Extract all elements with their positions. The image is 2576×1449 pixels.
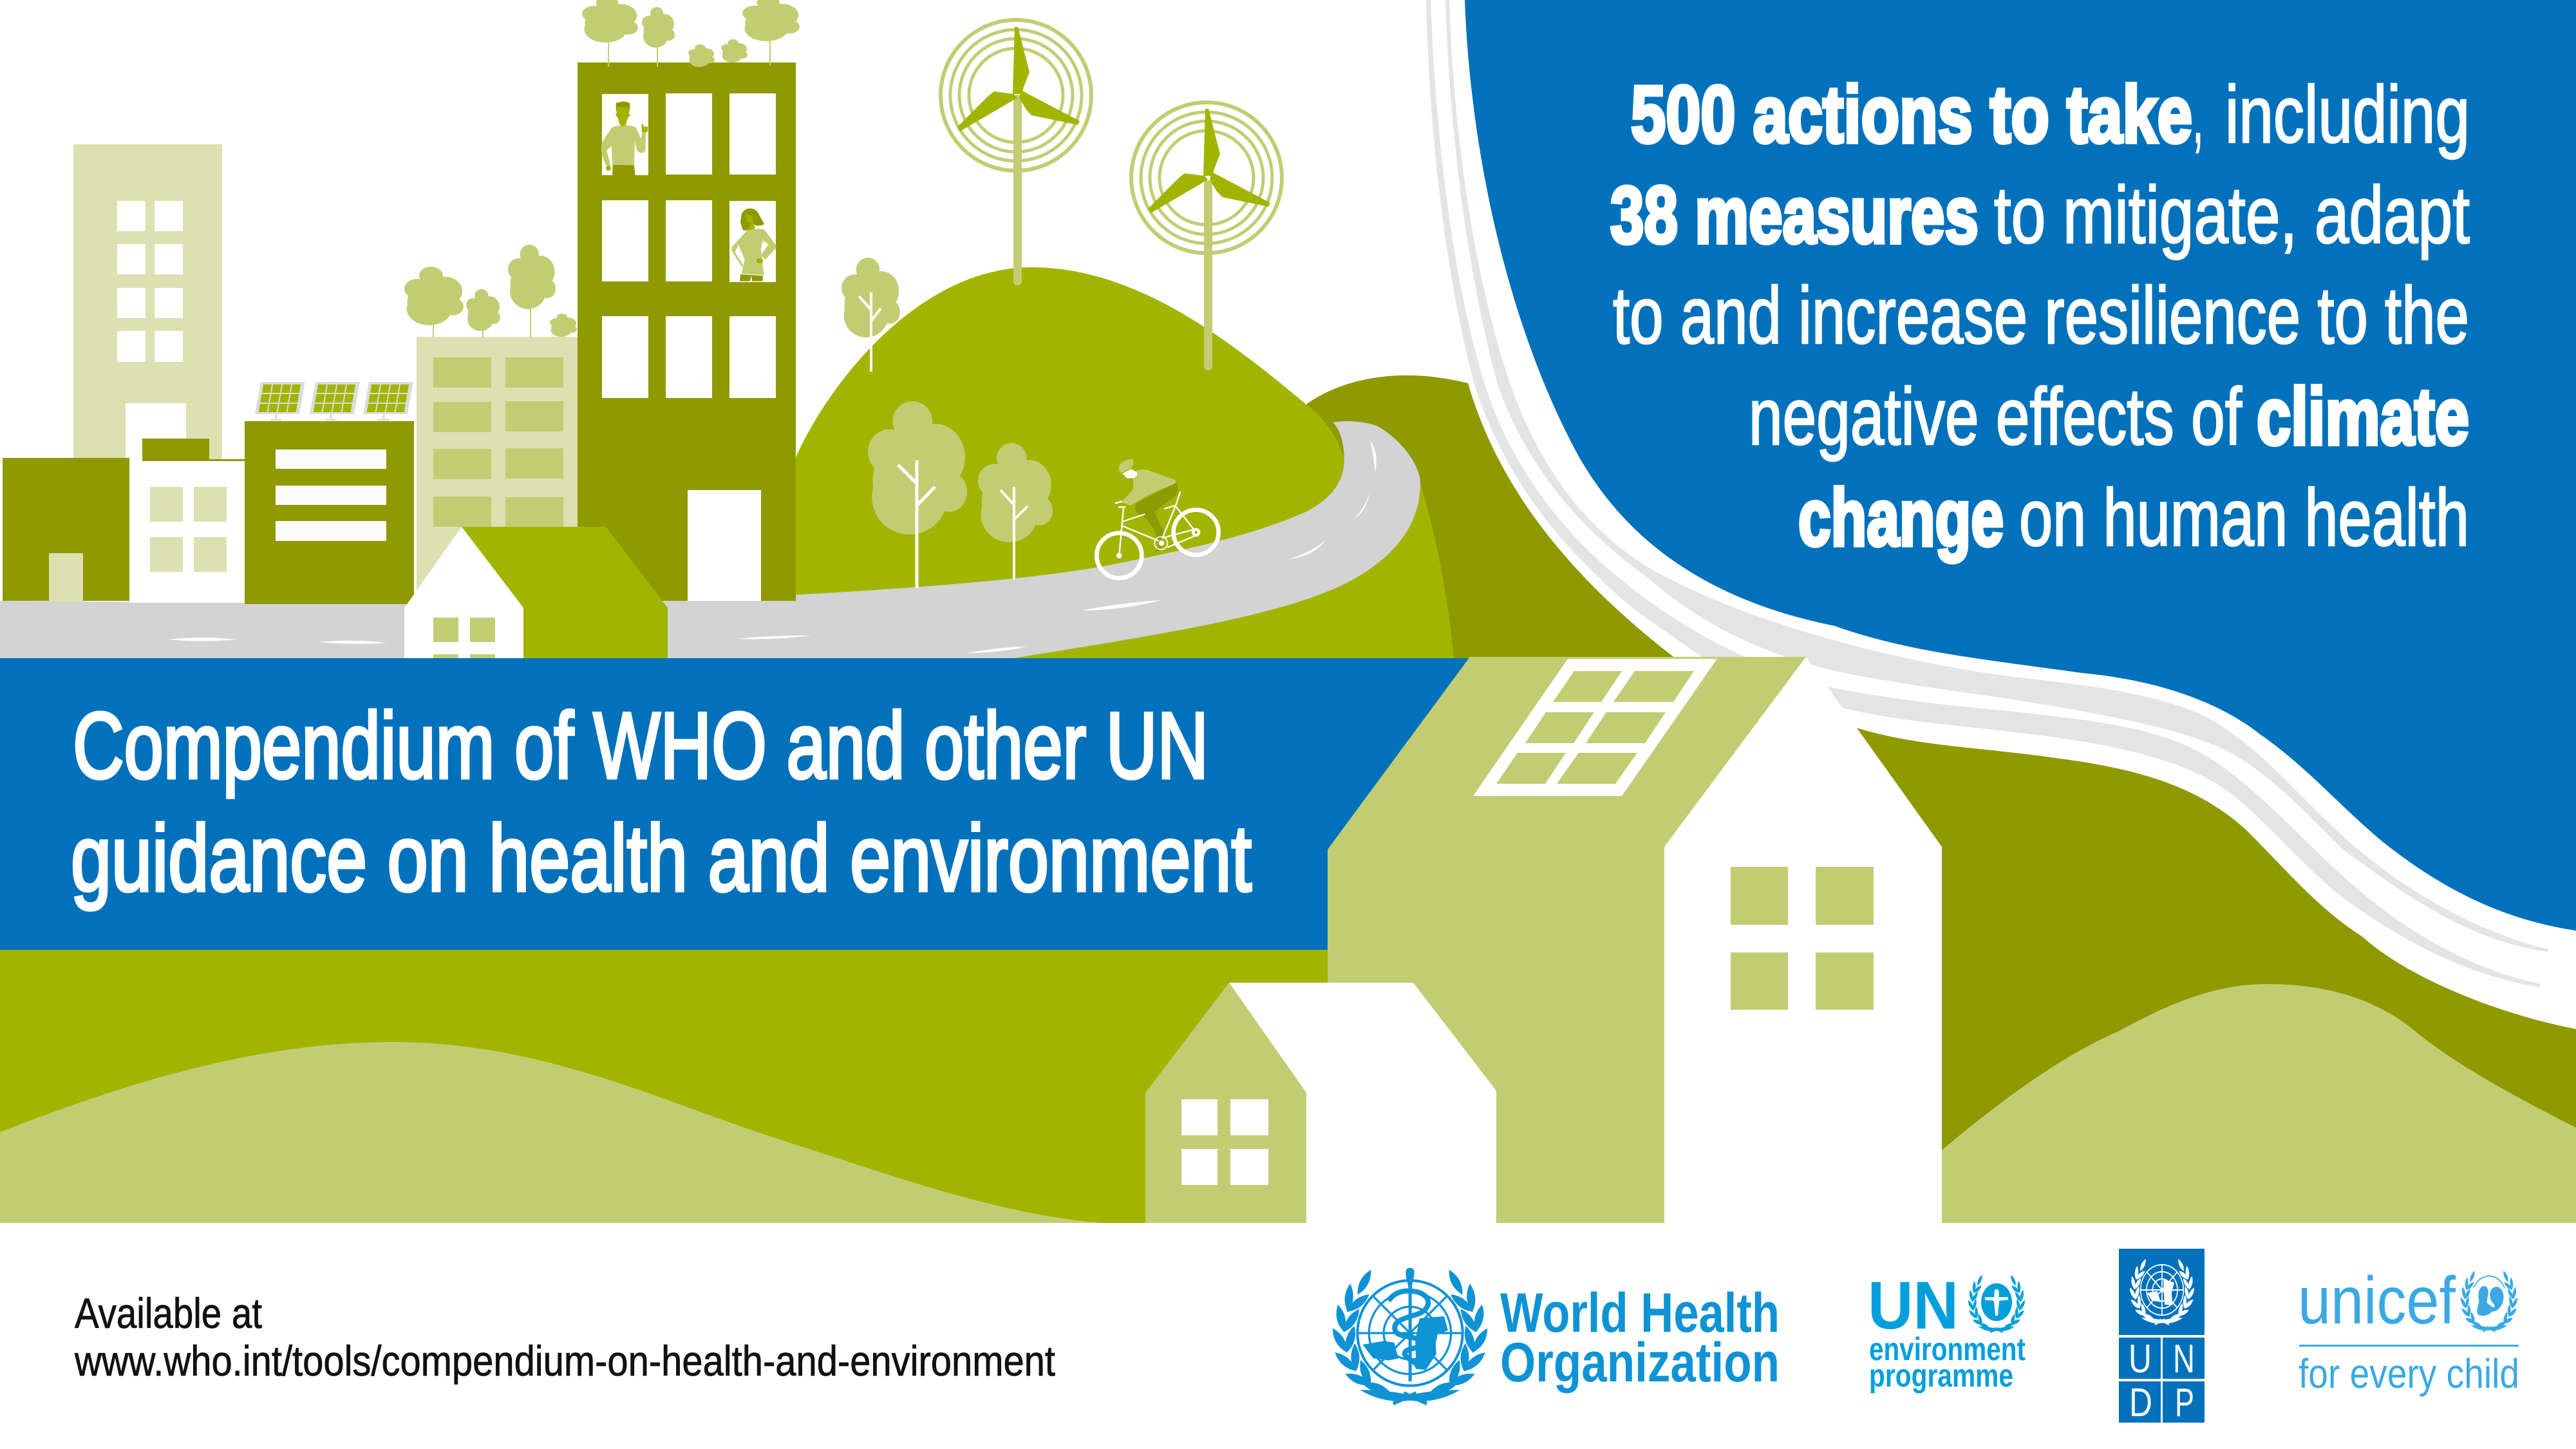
building: pale tower (73, 144, 222, 461)
hill: left foreground (0, 1042, 1101, 1223)
building: beige block (417, 337, 578, 605)
wind turbine 1 (941, 20, 1091, 285)
logo: UNICEF: for every child (2299, 1350, 2519, 1397)
building: dark block with solar panels (245, 382, 414, 604)
hill: bright green with turbines (796, 267, 1454, 658)
road (0, 421, 1420, 658)
key message text: change (1798, 473, 2004, 563)
WHO emblem (1329, 1268, 1491, 1403)
key message text: negative effects of (1749, 372, 2242, 462)
trees on beige block roof (404, 245, 577, 337)
logo: UNDP: P (2175, 1381, 2194, 1425)
logo: World Health Organization (1329, 1268, 1780, 1403)
availability note: Available at (75, 1289, 262, 1337)
turbine poles over the hill (1013, 258, 1212, 370)
logo: UN environment programme: programme (1869, 1358, 2013, 1394)
WHO wordmark (1500, 1282, 1780, 1394)
large house: white gable (1664, 657, 1942, 1223)
logo: UN environment programme (1868, 1268, 2026, 1394)
title (71, 693, 1252, 911)
key message text: 500 actions to take (1631, 70, 2192, 160)
front house: white roof and green gable (1145, 983, 1496, 1223)
availability note (74, 1289, 1055, 1385)
trees on tall tower roof (582, 0, 800, 67)
hill: dark green behind road (1307, 375, 1675, 658)
solar panels (255, 382, 413, 420)
decorative ribbon: upper grey band (1445, 0, 2548, 952)
hill: right foreground (1942, 984, 2576, 1223)
building: white block (129, 439, 245, 603)
wind turbine 2 (1131, 102, 1282, 370)
skylight (1473, 659, 1717, 796)
title: Compendium of WHO and other UN (73, 693, 1208, 798)
WHO wordmark: Organization (1500, 1332, 1780, 1394)
availability note: www.who.int/tools/compendium-on-health-and-environment (74, 1337, 1055, 1385)
key message text: , (2193, 70, 2203, 160)
person in window: man (601, 101, 648, 175)
panel: bright green field (0, 950, 1416, 1223)
panel: blue title band (0, 658, 1481, 950)
footer background (0, 1223, 2576, 1449)
building: tall dark tower (578, 62, 796, 601)
key message text (1610, 70, 2470, 563)
logo: UNDP: D (2129, 1381, 2152, 1425)
road markings (168, 440, 1377, 653)
logo: UNDP: N (2173, 1337, 2195, 1381)
large house: roof with skylight (1328, 657, 1806, 1223)
trees on hill (841, 258, 1053, 588)
decorative ribbon: lower grey band (1426, 0, 2541, 987)
UNEP emblem (1967, 1274, 2026, 1332)
logo: UNDP (2119, 1249, 2205, 1425)
panel: blue shape with text background (1465, 0, 2576, 931)
building: dark left block (3, 458, 129, 601)
logo: UNICEF (2298, 1264, 2519, 1397)
cyclist (1096, 459, 1219, 578)
hill: dark green right (1856, 728, 2576, 1223)
logo: UN environment programme: environment (1869, 1331, 2026, 1367)
logo: UNDP: U (2129, 1337, 2152, 1381)
title: guidance on health and environment (71, 806, 1252, 911)
UNDP emblem (2129, 1258, 2195, 1325)
logo: UN environment programme: UN (1868, 1268, 1959, 1343)
key message text: 38 measures (1610, 171, 1979, 260)
small house by the road (404, 527, 668, 658)
WHO wordmark: World Health (1500, 1282, 1780, 1344)
key message text: including (2225, 70, 2470, 160)
UNICEF emblem (2459, 1270, 2519, 1332)
person in window: woman (732, 209, 776, 281)
logo: UNICEF: unicef (2298, 1264, 2456, 1338)
key message text: climate (2257, 372, 2469, 462)
